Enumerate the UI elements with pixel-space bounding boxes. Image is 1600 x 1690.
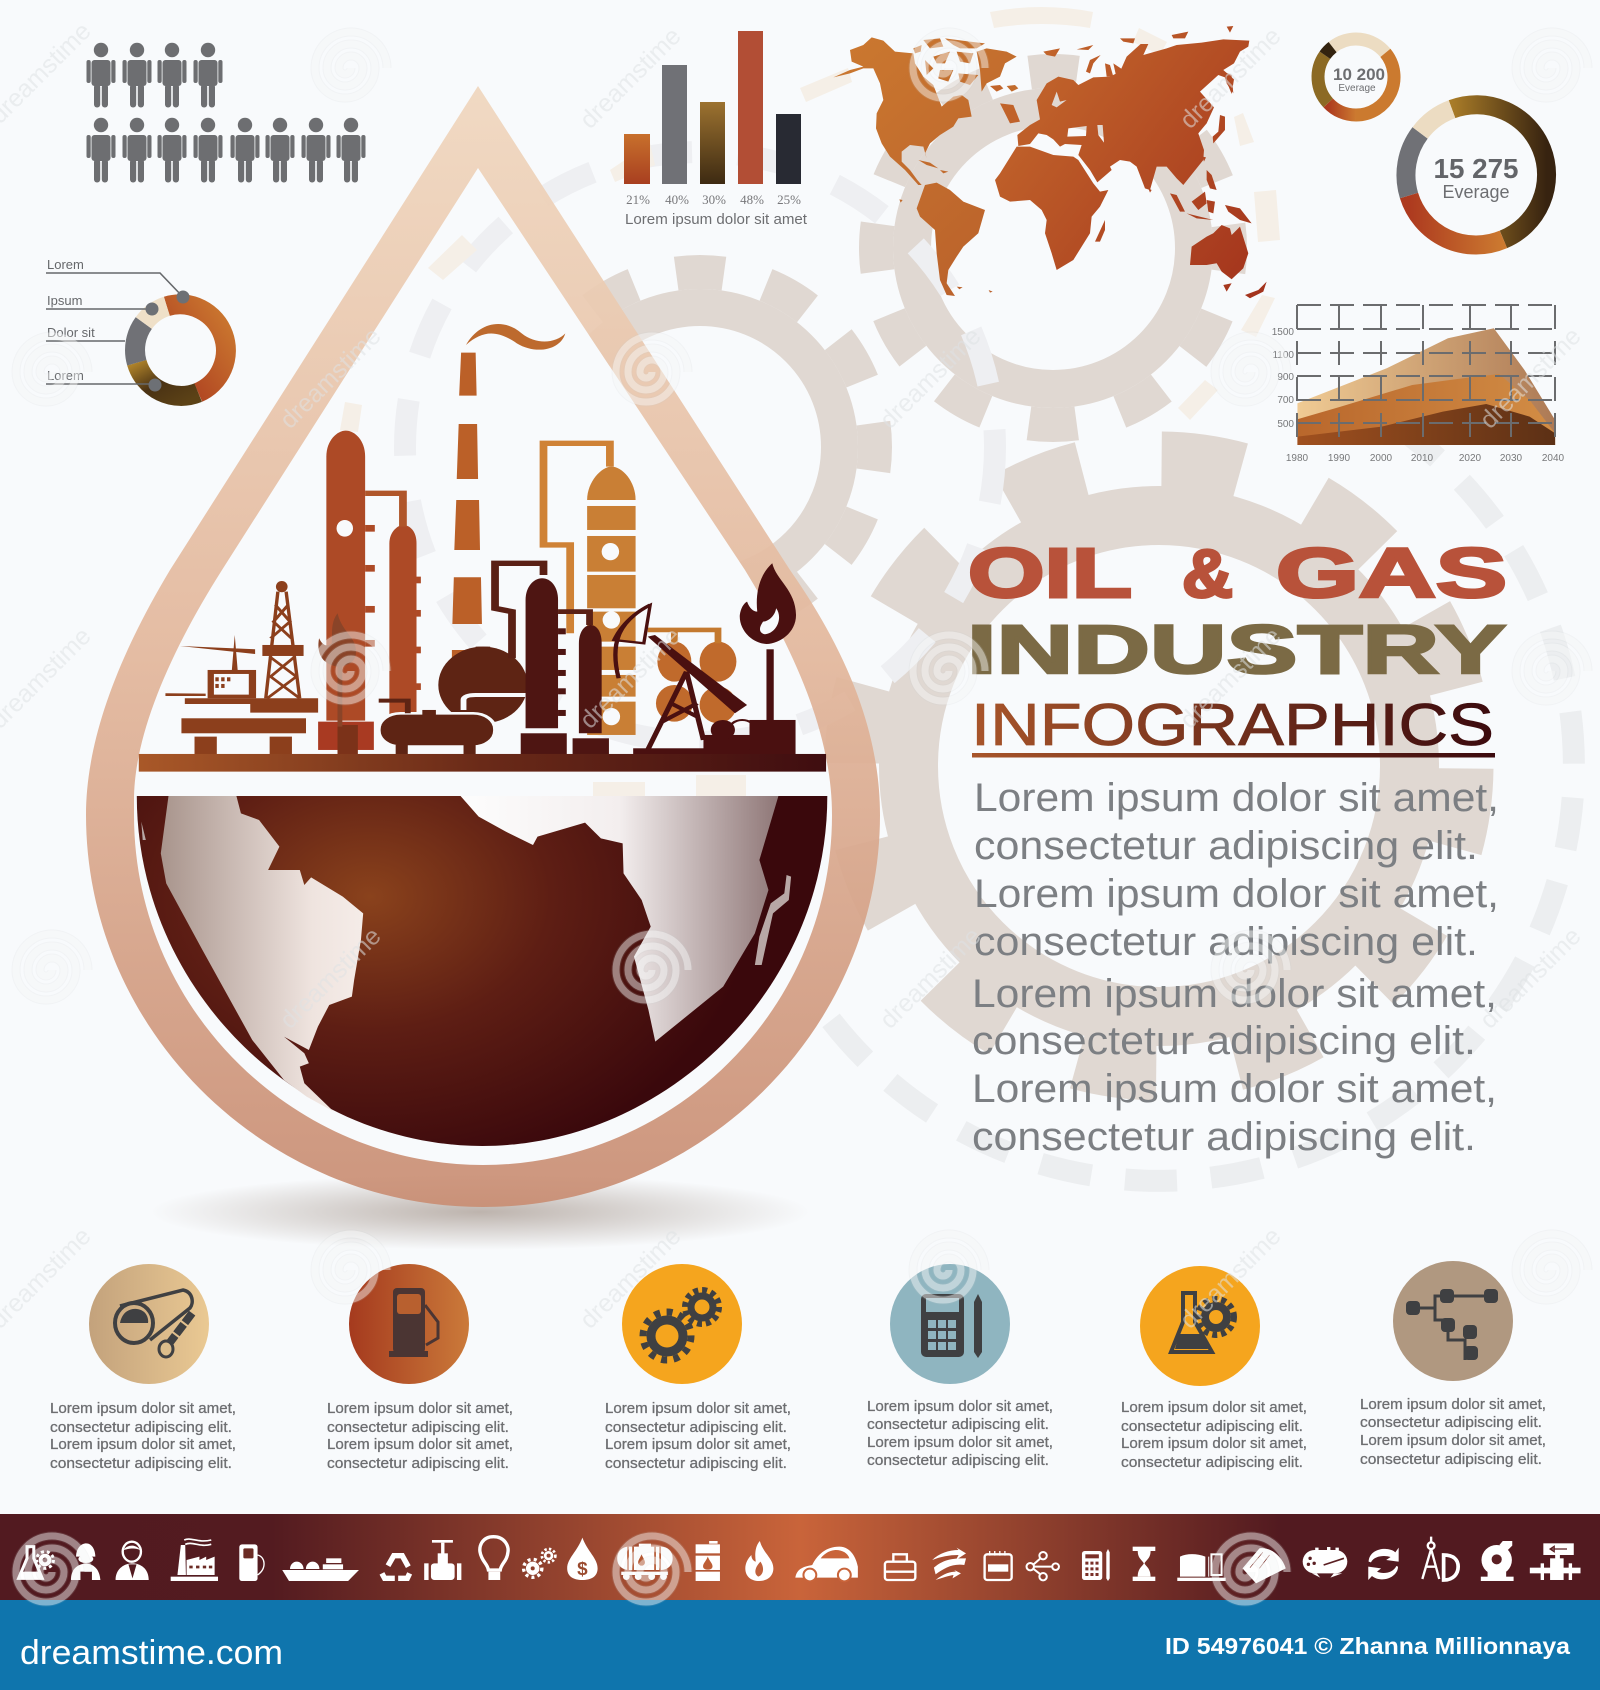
donut chart with labels: Lorem [47, 257, 84, 272]
area chart: 2030 [1500, 453, 1523, 464]
globe body [137, 796, 827, 1146]
caption column 6: Lorem ipsum dolor sit amet, [1360, 1432, 1546, 1449]
icon: light bulb [480, 1537, 508, 1580]
icon: drop with dollar [567, 1538, 598, 1580]
caption column 4: consectetur adipiscing elit. [867, 1452, 1049, 1469]
body text block [972, 776, 1499, 1159]
icon: cycle arrows [1368, 1548, 1399, 1580]
bar chart [624, 31, 808, 228]
watermark text: dreamstime [874, 922, 987, 1034]
dark columns [495, 563, 609, 755]
watermark text: dreamstime [574, 22, 687, 134]
watermark text: dreamstime [1174, 1222, 1287, 1334]
donut chart with labels: Lorem [47, 368, 84, 383]
title: oil and gas: GAS [1276, 534, 1507, 612]
title: oil and gas: & [1182, 536, 1233, 612]
dashed ring around large gear [819, 426, 1574, 1181]
icon: drafting compass [1422, 1537, 1458, 1580]
drop shadow [150, 1174, 810, 1250]
donut chart with labels: Dolor sit [47, 325, 95, 340]
watermark text: dreamstime [874, 322, 987, 434]
icon strip band [0, 1514, 1600, 1600]
icon: pipeline valve [1530, 1543, 1581, 1580]
title underline [972, 753, 1495, 758]
caption column 4: Lorem ipsum dolor sit amet, [867, 1398, 1053, 1415]
icon: share network [1027, 1552, 1059, 1580]
watermark text: dreamstime [274, 322, 387, 434]
world map [833, 26, 1267, 298]
caption column 5: consectetur adipiscing elit. [1121, 1454, 1303, 1471]
icon: gears [524, 1549, 555, 1577]
area chart: 1500 [1272, 327, 1294, 338]
ground bar [139, 754, 826, 772]
icon: arrows [932, 1548, 966, 1580]
watermark text: dreamstime [1474, 322, 1587, 434]
orange spheres [648, 630, 736, 723]
area chart: 2020 [1459, 453, 1482, 464]
caption column 6: consectetur adipiscing elit. [1360, 1451, 1542, 1468]
caption column 3: Lorem ipsum dolor sit amet, [605, 1436, 791, 1453]
donut: 10 200 average [1318, 39, 1394, 115]
gas flare [740, 563, 796, 755]
icon: notepad [985, 1551, 1012, 1580]
donut: 10 200 average: 10 200 [1333, 65, 1385, 84]
icon: toolbox [885, 1554, 915, 1580]
donut: 15 275 average: Everage [1442, 182, 1510, 202]
footer bar [0, 1600, 1600, 1690]
caption column 5: Lorem ipsum dolor sit amet, [1121, 1399, 1307, 1416]
oil drop ring [86, 86, 880, 1207]
body text block: Lorem ipsum dolor sit amet, [972, 1067, 1497, 1111]
area chart: 1990 [1328, 453, 1351, 464]
footer credit: ID 54976041 © Zhanna Millionnaya [1165, 1633, 1570, 1659]
icon: flask and gear [19, 1547, 53, 1578]
caption column 2: Lorem ipsum dolor sit amet, [327, 1400, 513, 1417]
bar chart: 48% [740, 192, 764, 207]
dashed ring inside drop [405, 152, 995, 742]
icon: worker [71, 1543, 100, 1580]
donut: 10 200 average: Everage [1338, 83, 1376, 94]
tall distillation columns [326, 431, 421, 721]
body text block: consectetur adipiscing elit. [974, 920, 1478, 964]
area chart [1272, 305, 1565, 464]
body text block: Lorem ipsum dolor sit amet, [972, 972, 1497, 1016]
icon: storage tank [1177, 1554, 1226, 1581]
caption column 1: Lorem ipsum dolor sit amet, [50, 1400, 236, 1417]
title: oil and gas: OIL [968, 534, 1132, 612]
caption column 3 [605, 1400, 791, 1472]
caption column 3: Lorem ipsum dolor sit amet, [605, 1400, 791, 1417]
donut chart with labels [46, 257, 226, 396]
caption column 2 [327, 1400, 513, 1472]
body text block: consectetur adipiscing elit. [972, 1019, 1476, 1063]
watermark text: dreamstime [574, 1222, 687, 1334]
caption column 4: consectetur adipiscing elit. [867, 1416, 1049, 1433]
watermark text: dreamstime [1174, 622, 1287, 734]
caption column 1 [50, 1400, 236, 1472]
icon: drop with dollar: $ [577, 1558, 588, 1579]
caption column 3: consectetur adipiscing elit. [605, 1419, 787, 1436]
footer logo: dreamstime.com [20, 1634, 283, 1672]
donut: 15 275 average [1406, 105, 1547, 245]
watermark text: dreamstime [1174, 22, 1287, 134]
body text block: Lorem ipsum dolor sit amet, [974, 776, 1499, 820]
small island highlight [141, 822, 146, 840]
area chart: 2000 [1370, 453, 1393, 464]
continent: South America [161, 796, 363, 1112]
title: industry: INDUSTRY [967, 611, 1506, 688]
icon circle: pipes [89, 1264, 209, 1384]
globe half [137, 796, 827, 1146]
strip icons middle [524, 1538, 1059, 1581]
caption column 1: consectetur adipiscing elit. [50, 1419, 232, 1436]
caption column 2: Lorem ipsum dolor sit amet, [327, 1436, 513, 1453]
icon: car [795, 1547, 858, 1581]
icon: rail tanker [617, 1544, 673, 1580]
icon: calculator [1082, 1549, 1110, 1581]
watermark text: dreamstime [574, 622, 687, 734]
icon: tanker ship [282, 1558, 359, 1581]
title [967, 534, 1507, 758]
icon circle: gears [622, 1264, 742, 1384]
continent: Africa [461, 796, 778, 1042]
area chart: 900 [1277, 372, 1294, 383]
caption column 6: Lorem ipsum dolor sit amet, [1360, 1396, 1546, 1413]
watermark text [0, 17, 1587, 1334]
bar chart: Lorem ipsum dolor sit amet [625, 211, 808, 228]
oil drop interior [134, 168, 832, 1165]
caption column 1: Lorem ipsum dolor sit amet, [50, 1436, 236, 1453]
icon circle: flask and gear [1140, 1266, 1260, 1386]
watermark text: dreamstime [1474, 922, 1587, 1034]
bar chart: 40% [665, 192, 689, 207]
icon: recycle [382, 1556, 410, 1578]
icon: pipe valve [424, 1540, 461, 1580]
watermark text: dreamstime [274, 922, 387, 1034]
caption column 2: consectetur adipiscing elit. [327, 1419, 509, 1436]
beige dash fragments around map gear [800, 7, 1280, 420]
icon: factory [171, 1539, 218, 1581]
beige dash fragments [340, 143, 746, 796]
icon: boiler [1303, 1547, 1347, 1578]
area chart: 700 [1277, 395, 1294, 406]
caption column 5: Lorem ipsum dolor sit amet, [1121, 1435, 1307, 1452]
area chart: 500 [1277, 419, 1294, 430]
icon circle: fuel pump [349, 1264, 469, 1384]
map: Eurasia, Africa, Oceania [990, 26, 1267, 298]
strip icons right [1082, 1537, 1581, 1583]
caption column 4: Lorem ipsum dolor sit amet, [867, 1434, 1053, 1451]
donut chart with labels: Ipsum [47, 293, 82, 308]
icon: fuel pump [239, 1544, 264, 1581]
title: infographics: INFOGRAPHICS [971, 692, 1494, 758]
caption column 5 [1121, 1399, 1307, 1471]
map: Americas and Greenland [833, 37, 1018, 296]
offshore platform [165, 581, 318, 755]
refinery skyline [139, 324, 826, 772]
smoke [466, 324, 565, 350]
area chart: 2040 [1542, 453, 1565, 464]
area chart: 2010 [1411, 453, 1434, 464]
people pictogram [86, 43, 366, 182]
icon: flame [745, 1541, 773, 1581]
bar chart: 21% [626, 192, 650, 207]
caption column 6: consectetur adipiscing elit. [1360, 1414, 1542, 1431]
caption column 3: consectetur adipiscing elit. [605, 1455, 787, 1472]
icon circle: calculator and pencil [890, 1264, 1010, 1384]
column base and small flame [318, 613, 374, 755]
bar chart: 25% [777, 192, 801, 207]
strip icons left [19, 1537, 508, 1581]
icon circle: flowchart [1393, 1261, 1513, 1381]
chimney [452, 353, 483, 733]
donut: 15 275 average: 15 275 [1434, 153, 1518, 184]
icon: oil barrel [696, 1541, 720, 1581]
area chart: 1100 [1272, 350, 1294, 361]
pumpjack [614, 605, 755, 755]
caption column 2: consectetur adipiscing elit. [327, 1455, 509, 1472]
icon: hard hat [1243, 1548, 1286, 1583]
area chart: 1980 [1286, 453, 1309, 464]
orange column tower [544, 443, 636, 735]
body text block: consectetur adipiscing elit. [972, 1115, 1476, 1159]
body text block: Lorem ipsum dolor sit amet, [974, 872, 1499, 916]
title: oil and gas [968, 534, 1507, 612]
icon: hourglass [1133, 1547, 1155, 1581]
Madagascar highlight [755, 875, 791, 965]
caption column 4 [867, 1398, 1053, 1469]
spherical and horizontal tanks [379, 647, 528, 754]
background gears [525, 71, 1506, 1113]
caption column 5: consectetur adipiscing elit. [1121, 1418, 1303, 1435]
icon: centrifugal pump [1481, 1541, 1514, 1581]
body text block: consectetur adipiscing elit. [974, 824, 1478, 868]
caption column 6 [1360, 1396, 1546, 1468]
caption column 1: consectetur adipiscing elit. [50, 1455, 232, 1472]
icon: businessman [116, 1542, 149, 1580]
bar chart: 30% [702, 192, 726, 207]
